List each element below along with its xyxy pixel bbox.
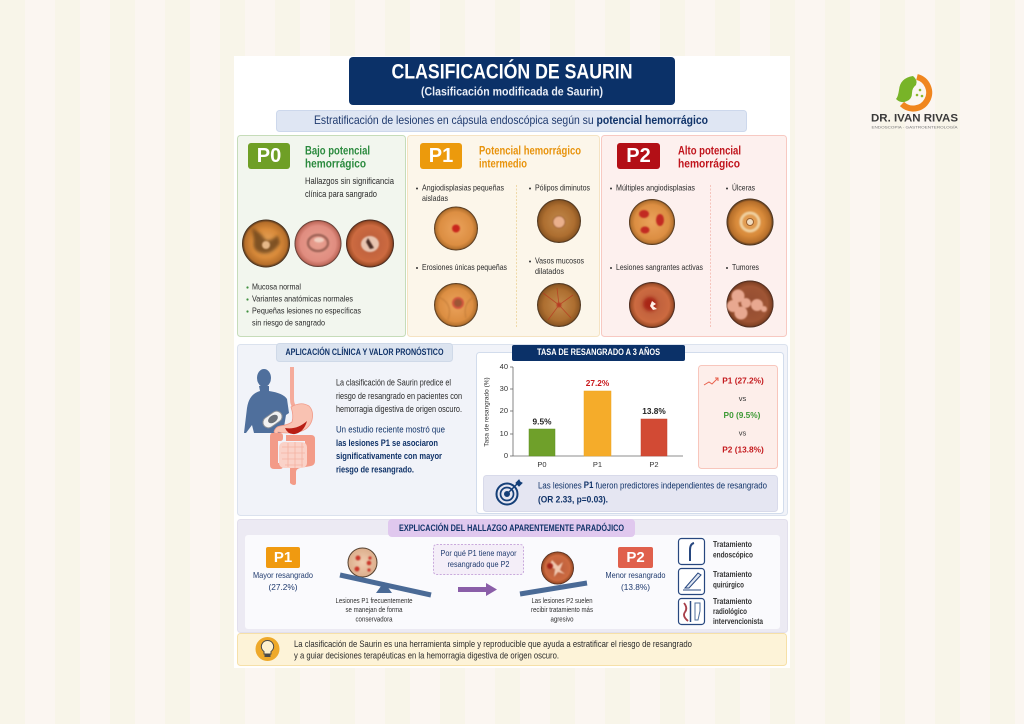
bar chart: 10 (500, 429, 508, 438)
callout: independent predictors: Las lesiones P1 fueron predictores independientes de resangrado (538, 480, 767, 490)
panel: clinical application (238, 344, 788, 516)
icon: surgical treatment: Tratamiento (713, 570, 752, 579)
icon: target (496, 480, 522, 504)
panel: P1 (408, 136, 600, 336)
P2 result: (13.8%) (621, 582, 650, 592)
bar: P1: P1 (593, 460, 602, 469)
callout: why P1 rebleeds more: Por qué P1 tiene mayor (440, 549, 517, 558)
P2 badge (617, 143, 660, 169)
P0 heading: hemorrágico (305, 157, 366, 171)
bar chart (484, 362, 683, 469)
text: prediction paragraph: La clasificación de Saurin predice el (336, 377, 451, 387)
P2 heading: hemorrágico (678, 157, 740, 171)
callout: independent predictors (484, 476, 778, 512)
image: normal mucosa (242, 220, 290, 268)
P2 result: P2 (626, 549, 645, 566)
bar: P2: P2 (649, 460, 659, 469)
title banner (349, 57, 675, 105)
P0 findings list (246, 282, 361, 328)
P0 findings list: Mucosa normal (252, 282, 301, 292)
bar chart: 0 (504, 451, 508, 460)
item: tumors (726, 262, 774, 328)
P1 badge (420, 143, 462, 169)
item: small isolated angiodysplasias (416, 183, 504, 250)
item: dilated mucosal vessels (529, 256, 584, 327)
bar: P0: 9.5% (533, 417, 552, 427)
icon: endoscopic treatment: endoscópico (713, 551, 753, 560)
item: active bleeding lesions: Lesiones sangrantes activas (616, 262, 703, 272)
logo: Dr. Ivan Rivas: DR. IVAN RIVAS (871, 112, 958, 124)
text: study highlight: riesgo de resangrado. (336, 464, 414, 474)
callout: comparison: vs (739, 428, 746, 437)
P0 badge: P0 (257, 145, 281, 167)
text: prediction paragraph (336, 377, 462, 414)
P0 heading: Bajo potencial (305, 144, 370, 158)
seesaw: P1 conservative (336, 548, 431, 623)
callout: conclusion (238, 634, 786, 666)
bar: P2: 13.8% (642, 406, 666, 416)
seesaw: P2 aggressive (520, 552, 593, 623)
panel: P0 (238, 136, 406, 336)
text: prediction paragraph: riesgo de resangrado en pacientes con (336, 391, 462, 401)
text: study highlight (336, 424, 445, 474)
heading tab: rebleeding rate (512, 345, 685, 361)
P0 findings list: sin riesgo de sangrado (252, 318, 325, 328)
item: active bleeding lesions (610, 262, 703, 328)
icon: surgical treatment: quirúrgico (713, 581, 744, 590)
P1 badge: P1 (429, 145, 453, 167)
text: study highlight: las lesiones P1 se asociaron (336, 438, 438, 448)
image: anatomical variant (294, 220, 342, 267)
item: small isolated angiodysplasias: aisladas (422, 193, 448, 203)
P2 badge: P2 (626, 145, 651, 167)
logo: Dr. Ivan Rivas (871, 76, 958, 130)
P0 description: clínica para sangrado (305, 189, 377, 199)
icon: trend arrow (704, 378, 718, 385)
P2 heading: Alto potencial (678, 144, 741, 158)
seesaw: P1 conservative: Lesiones P1 frecuentemente (336, 598, 413, 605)
main white sheet (234, 56, 790, 668)
P1 heading (479, 144, 581, 171)
P0 description (305, 176, 394, 199)
P0 heading (305, 144, 370, 171)
P1 heading: Potencial hemorrágico (479, 144, 581, 158)
heading tab: paradox: EXPLICACIÓN DEL HALLAZGO APARENTEMENTE PARADÓJICO (399, 522, 624, 533)
callout: conclusion: y a guiar decisiones terapéuticas en la hemorragia digestiva de origen oscuro. (294, 650, 559, 660)
bar chart: 20 (500, 406, 508, 415)
text: prediction paragraph: hemorragia digestiva de origen oscuro. (336, 404, 462, 414)
callout: conclusion: La clasificación de Saurin es una herramienta simple y reproducible que ayuda a estratificar el riesgo de resangrado (294, 639, 692, 649)
P2 result (606, 547, 666, 592)
P1 result (253, 547, 313, 592)
bar: P2 (641, 406, 667, 469)
item: small isolated angiodysplasias: Angiodisplasias pequeñas (422, 183, 504, 193)
text: study highlight: significativamente con mayor (336, 451, 442, 461)
P1 result: Mayor resangrado (253, 570, 313, 580)
seesaw: P2 aggressive: agresivo (550, 616, 574, 623)
seesaw: P2 aggressive: Las lesiones P2 suelen (532, 598, 593, 605)
bar: P1: 27.2% (586, 378, 610, 388)
icon: patient silhouette with capsule (244, 369, 289, 433)
icon: endoscopic treatment: Tratamiento (713, 540, 752, 549)
title banner: (Clasificación modificada de Saurin) (421, 85, 603, 99)
callout: why P1 rebleeds more (434, 544, 524, 574)
callout: comparison: vs (739, 394, 746, 403)
heading tab: clinical application: APLICACIÓN CLÍNICA Y VALOR PRONÓSTICO (286, 346, 444, 357)
callout: comparison: P0 (9.5%) (724, 410, 761, 420)
item: small single erosions: Erosiones únicas pequeñas (422, 262, 507, 272)
subtitle bar: Estratificación de lesiones en cápsula endoscópica según su potencial hemorrágico (314, 113, 708, 127)
item: ulcers (726, 183, 774, 246)
panel: paradox explanation (238, 519, 788, 632)
item: dilated mucosal vessels: dilatados (535, 266, 564, 276)
item: tiny polyps (529, 183, 590, 243)
bar: P0: P0 (537, 460, 547, 469)
P0 badge (248, 143, 290, 169)
callout: why P1 rebleeds more: resangrado que P2 (448, 560, 510, 569)
panel: P2 (602, 136, 786, 336)
heading tab: clinical application (276, 344, 452, 362)
arrow (458, 583, 497, 596)
icon: surgical treatment (678, 568, 752, 594)
item: small single erosions (416, 262, 507, 327)
item: multiple angiodysplasias: Múltiples angiodisplasias (616, 183, 695, 193)
icon: digestive tract (270, 367, 315, 485)
bar chart: 30 (500, 384, 508, 393)
item: ulcers: Úlceras (732, 183, 755, 193)
panel: rebleeding rate card (476, 345, 784, 514)
P1 result: P1 (274, 549, 292, 566)
icon: light bulb (256, 637, 280, 661)
icon: endoscopic treatment (678, 538, 753, 564)
item: multiple angiodysplasias (610, 183, 695, 245)
item: tumors: Tumores (732, 262, 759, 272)
image: nonspecific lesion (346, 220, 394, 268)
heading tab: paradox (388, 519, 635, 537)
subtitle bar (276, 110, 746, 132)
callout: comparison: P2 (13.8%) (722, 445, 764, 455)
seesaw: P2 aggressive: recibir tratamiento más (531, 607, 593, 614)
bar chart: Tasa de resangrado (%) (484, 377, 491, 447)
bar: P0 (529, 417, 555, 469)
item: tiny polyps: Pólipos diminutos (535, 183, 590, 193)
P1 result: (27.2%) (268, 582, 298, 592)
P1 heading: intermedio (479, 157, 527, 171)
seesaw: P1 conservative: conservadora (356, 616, 393, 623)
P0 findings list: Pequeñas lesiones no específicas (252, 306, 361, 316)
P0 description: Hallazgos sin significancia (305, 176, 394, 186)
P2 heading (678, 144, 741, 171)
logo: Dr. Ivan Rivas: ENDOSCOPIA · GASTROENTEROLOGÍA (872, 125, 958, 130)
seesaw: P1 conservative: se manejan de forma (346, 607, 403, 614)
item: dilated mucosal vessels: Vasos mucosos (535, 256, 584, 266)
P0 findings list: Variantes anatómicas normales (252, 294, 353, 304)
heading tab: rebleeding rate: TASA DE RESANGRADO A 3 AÑOS (537, 347, 660, 357)
icon: interventional radiology: radiológico (713, 607, 747, 616)
icon: interventional radiology: Tratamiento (713, 597, 752, 606)
callout: comparison: P1 (27.2%) (722, 376, 764, 386)
text: study highlight: Un estudio reciente mostró que (336, 424, 445, 434)
icon: interventional radiology (678, 597, 764, 626)
bar chart: 40 (500, 362, 508, 371)
bar: P1 (584, 378, 611, 469)
callout: comparison (698, 366, 778, 468)
callout: independent predictors: (OR 2.33, p=0.03). (538, 494, 608, 504)
title banner: CLASIFICACIÓN DE SAURIN (392, 60, 632, 84)
P2 result: Menor resangrado (606, 570, 666, 580)
icon: interventional radiology: intervencionista (713, 617, 764, 626)
